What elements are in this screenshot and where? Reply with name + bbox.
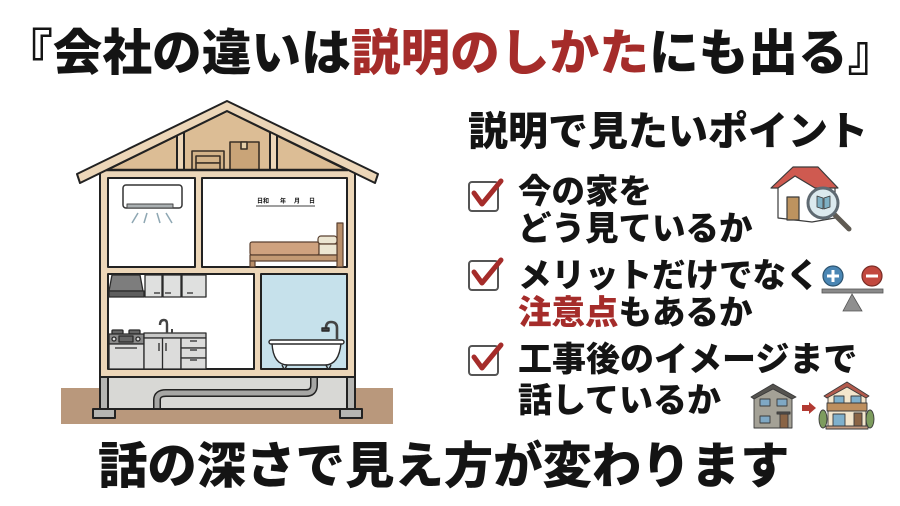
text: item 2: メリットだけでなく (518, 258, 820, 295)
trees (819, 410, 874, 428)
icon: checkbox 2 (469, 260, 501, 290)
icon: house with magnifying glass (771, 167, 849, 229)
checklist item 3 (469, 341, 867, 420)
attic (106, 111, 348, 170)
calendar note: 月 (294, 198, 300, 205)
foundation and crawl space (93, 376, 362, 418)
text: item 3: 工事後のイメージまで (518, 341, 857, 379)
roof (77, 101, 378, 183)
kitchen counter (109, 320, 206, 369)
house frame walls (100, 168, 355, 377)
old house (751, 384, 796, 428)
air conditioner (123, 185, 182, 223)
calendar note: 年 (280, 197, 286, 205)
text: item 1: どう見ているか (518, 211, 753, 248)
attic box (230, 142, 259, 170)
room: upper left (108, 178, 195, 267)
ground (61, 388, 393, 424)
icon: house before and after renovation (751, 382, 874, 429)
bed (250, 223, 343, 267)
icon: checkbox 1 (469, 181, 501, 211)
range hood and wall cabinets (109, 275, 206, 297)
heading: points to check: 説明で見たいポイント (468, 110, 868, 154)
arrow (802, 402, 816, 414)
calendar note: 日和 (257, 197, 269, 205)
text: item 1: 今の家を (518, 174, 652, 211)
room: upper right (202, 178, 347, 267)
attic shelf (192, 151, 224, 170)
title: 『会社の違いは説明のしかたにも出る』 (3, 25, 897, 81)
checklist item 1 (469, 174, 753, 248)
calendar note (256, 197, 315, 206)
text: item 2: 注意点 (518, 295, 618, 332)
bathtub and faucet (269, 322, 344, 369)
attic posts (177, 132, 184, 170)
underfloor pipe (157, 377, 314, 408)
icon: checkbox 3 (469, 345, 501, 375)
room: bathroom (261, 274, 347, 369)
calendar note: 日 (309, 198, 315, 205)
room: kitchen (108, 274, 254, 369)
text: item 3: 話しているか (518, 382, 721, 420)
icon: balance scale with plus and minus (822, 266, 883, 311)
checklist item 2 (469, 258, 829, 332)
renovated house (819, 382, 874, 429)
text: item 2: もあるか (618, 295, 753, 332)
illustration: house cross-section (61, 101, 393, 424)
bottom message: 話の深さで見え方が変わります (98, 439, 789, 494)
